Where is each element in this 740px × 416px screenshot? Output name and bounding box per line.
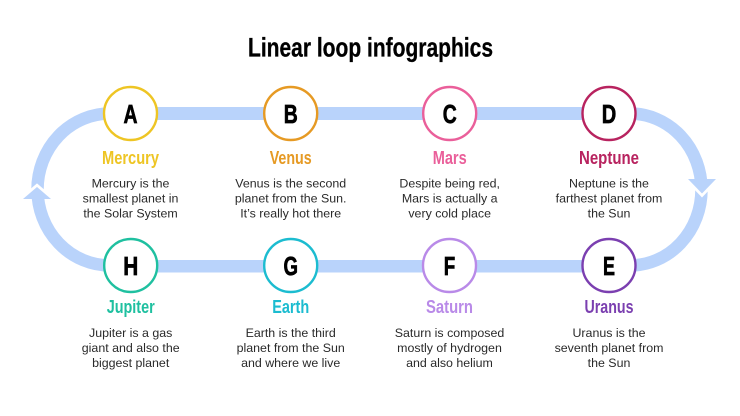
- right arrowhead: [688, 179, 716, 194]
- node E: Uranus: the Sun: [588, 356, 630, 370]
- node D: Neptune: the Sun: [588, 206, 630, 220]
- node A: Mercury: smallest planet in: [83, 192, 178, 206]
- node G: Earth: G: [283, 251, 298, 281]
- node B: Venus: Venus is the second: [235, 176, 346, 190]
- node D: Neptune: [556, 87, 662, 220]
- node H: Jupiter: Jupiter: [107, 297, 155, 317]
- loop track with arrows: [23, 107, 716, 272]
- right arrow white chevron gap: [688, 179, 716, 194]
- node D: Neptune: Neptune: [579, 148, 639, 168]
- node D: Neptune: farthest planet from: [556, 192, 662, 206]
- node F: Saturn: Saturn is composed: [395, 326, 504, 340]
- node E: Uranus: [555, 239, 663, 370]
- node C: Mars: C: [443, 99, 457, 129]
- node H: Jupiter: Jupiter is a gas: [89, 326, 172, 340]
- node A: Mercury: Mercury: [102, 148, 159, 168]
- node B: Venus: Venus: [270, 148, 312, 168]
- node F: Saturn: Saturn: [426, 297, 473, 317]
- node F: Saturn: F: [444, 251, 455, 281]
- node B: Venus: It’s really hot there: [240, 206, 341, 220]
- node D: Neptune: D: [602, 99, 616, 129]
- node E: Uranus: E: [603, 251, 615, 281]
- node F: Saturn: [395, 239, 504, 370]
- node H: Jupiter: H: [123, 251, 138, 281]
- node B: Venus: planet from the Sun.: [235, 192, 346, 206]
- node G: Earth: and where we live: [241, 356, 340, 370]
- node C: Mars: Despite being red,: [399, 176, 500, 190]
- node G: Earth: planet from the Sun: [237, 341, 345, 355]
- node C: Mars: very cold place: [408, 206, 491, 220]
- left arrow white chevron gap: [23, 187, 51, 199]
- node E: Uranus: Uranus is the: [572, 326, 646, 340]
- node B: Venus: B: [284, 99, 298, 129]
- left loop arc: [38, 114, 110, 266]
- node F: Saturn: and also helium: [406, 356, 493, 370]
- title: Linear loop infographics: [248, 32, 493, 62]
- node E: Uranus: seventh planet from: [555, 341, 663, 355]
- node B: Venus: [235, 87, 346, 220]
- node G: Earth: [237, 239, 345, 370]
- bottom connector band: [130, 260, 609, 272]
- node G: Earth: Earth is the third: [246, 326, 336, 340]
- node A: Mercury: the Solar System: [83, 206, 178, 220]
- node A: Mercury: [83, 87, 178, 220]
- node G: Earth: Earth: [272, 297, 309, 317]
- node H: Jupiter: giant and also the: [82, 341, 180, 355]
- node C: Mars: Mars: [433, 148, 467, 168]
- node A: Mercury: A: [124, 99, 138, 129]
- node F: Saturn: mostly of hydrogen: [397, 341, 502, 355]
- node C: Mars: [399, 87, 500, 220]
- top connector band: [130, 107, 609, 120]
- node H: Jupiter: [82, 239, 180, 370]
- left arrowhead: [23, 187, 51, 199]
- node D: Neptune: Neptune is the: [569, 176, 649, 190]
- node C: Mars: Mars is actually a: [402, 192, 498, 206]
- node E: Uranus: Uranus: [584, 297, 634, 317]
- node A: Mercury: Mercury is the: [92, 176, 170, 190]
- right loop arc: [630, 114, 702, 266]
- node H: Jupiter: biggest planet: [92, 356, 170, 370]
